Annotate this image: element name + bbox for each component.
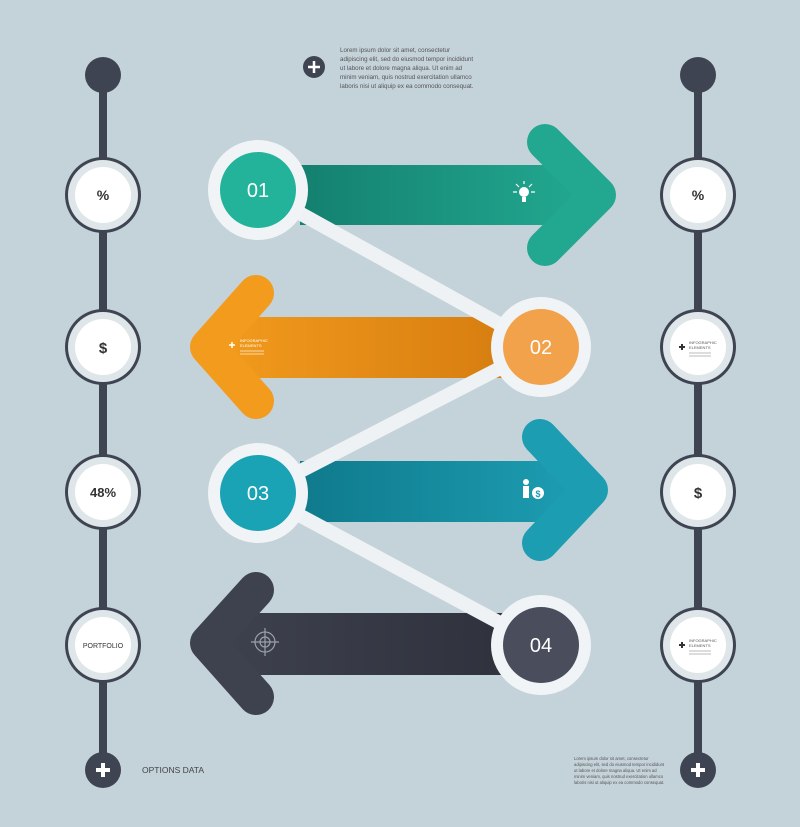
step circle 01: 01 bbox=[247, 180, 269, 202]
step circle 04: 04 bbox=[530, 635, 552, 657]
top dot right bbox=[680, 57, 716, 93]
top text block bbox=[303, 47, 474, 90]
badge: text right 2: ELEMENTS bbox=[689, 643, 711, 648]
bottom right text block: ut labore et dolore magna aliqua. Ut enim ad bbox=[574, 768, 657, 773]
bottom right text block: laboris nisi ut aliquip ex ea commodo consequat. bbox=[574, 780, 664, 785]
step circle 03: 03 bbox=[247, 483, 269, 505]
top text block: ut labore et dolore magna aliqua. Ut enim ad bbox=[340, 65, 463, 72]
options data label: OPTIONS DATA bbox=[142, 765, 204, 775]
badge: text right 1: ELEMENTS bbox=[689, 345, 711, 350]
badge: dollar right: $ bbox=[694, 485, 703, 502]
step circle 04 bbox=[491, 595, 591, 695]
badge: text right 2 bbox=[660, 607, 736, 683]
connector lines bbox=[258, 190, 541, 645]
top text block: laboris nisi ut aliquip ex ea commodo consequat. bbox=[340, 83, 474, 90]
badge: portfolio bbox=[65, 607, 141, 683]
right timeline column bbox=[660, 57, 736, 788]
icon: target bbox=[251, 628, 279, 656]
arrow 4 dark bbox=[208, 590, 510, 697]
badge: percent left: % bbox=[97, 187, 110, 203]
step circle 01 bbox=[208, 140, 308, 240]
arrow 2 orange bbox=[208, 293, 510, 401]
badge: text right 1: INFOGRAPHIC bbox=[689, 340, 717, 345]
step circle 02 bbox=[491, 297, 591, 397]
bottom right text block: adipiscing elit, sed do eiusmod tempor incididunt bbox=[574, 762, 665, 767]
bottom right text block bbox=[574, 756, 665, 785]
left timeline column bbox=[65, 57, 141, 788]
badge: 48%: 48% bbox=[90, 485, 116, 500]
bottom plus right bbox=[680, 752, 716, 788]
top dot left bbox=[85, 57, 121, 93]
badge: dollar left: $ bbox=[99, 340, 108, 357]
step circle 02: 02 bbox=[530, 337, 552, 359]
bottom right text block: minim veniam, quis nostrud exercitation ullamco bbox=[574, 774, 664, 779]
icon: lightbulb bbox=[513, 181, 535, 202]
badge: text right 1 bbox=[660, 309, 736, 385]
bottom plus left bbox=[85, 752, 121, 788]
arrow 1 teal bbox=[300, 142, 598, 248]
orange arrow label: INFOGRAPHIC bbox=[240, 338, 268, 343]
icon: person dollar: $ bbox=[535, 489, 541, 499]
badge: dollar left bbox=[65, 309, 141, 385]
badge: percent left bbox=[65, 157, 141, 233]
top text block: adipiscing elit, sed do eiusmod tempor incididunt bbox=[340, 56, 473, 63]
badge: portfolio: PORTFOLIO bbox=[83, 643, 124, 650]
badge: text right 2: INFOGRAPHIC bbox=[689, 638, 717, 643]
orange arrow label bbox=[229, 338, 268, 354]
step circle 03 bbox=[208, 443, 308, 543]
bottom right text block: Lorem ipsum dolor sit amet, consectetur bbox=[574, 756, 649, 761]
icon: person dollar bbox=[523, 479, 544, 499]
arrow 3 blue bbox=[300, 437, 590, 543]
badge: percent right bbox=[660, 157, 736, 233]
orange arrow label: ELEMENTS bbox=[240, 343, 262, 348]
top text block: Lorem ipsum dolor sit amet, consectetur bbox=[340, 47, 450, 54]
badge: 48% bbox=[65, 454, 141, 530]
top text block: minim veniam, quis nostrud exercitation ullamco bbox=[340, 74, 472, 81]
badge: dollar right bbox=[660, 454, 736, 530]
badge: percent right: % bbox=[692, 187, 705, 203]
